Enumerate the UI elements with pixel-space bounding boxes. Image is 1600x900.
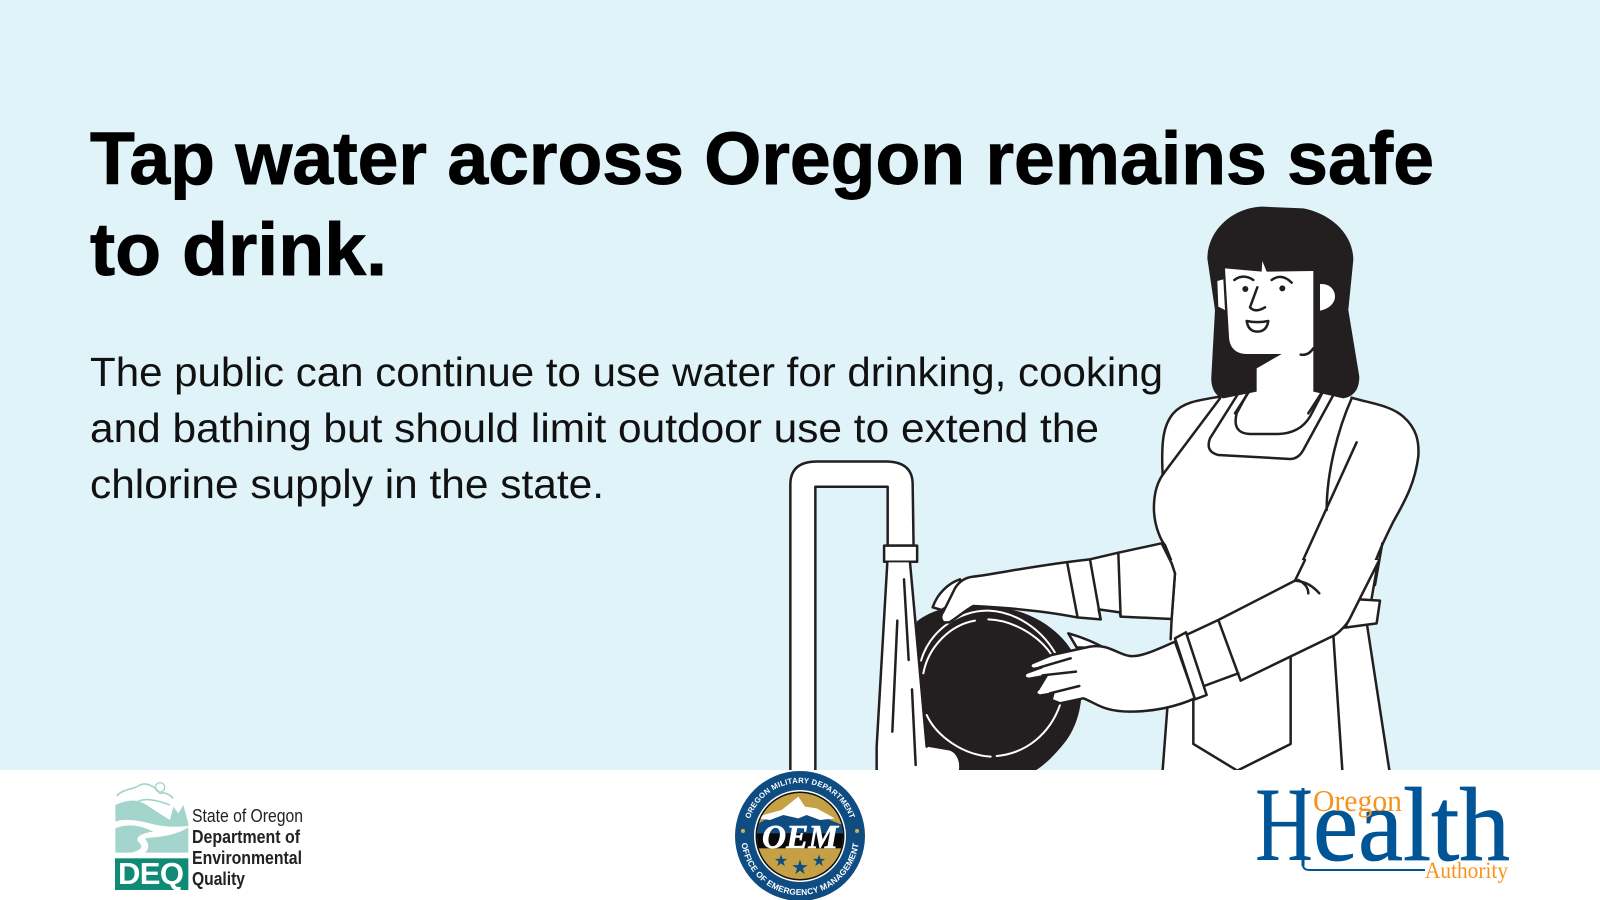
face and neck	[1217, 261, 1335, 413]
logo: DEQ: Quality	[192, 869, 245, 889]
figure: far arm with hand on plate	[941, 543, 1175, 622]
figure: head and hair	[1207, 207, 1359, 413]
title: to drink.	[90, 208, 387, 291]
apron tie	[1345, 599, 1380, 628]
footer band	[0, 770, 1600, 900]
logo: Oregon Health Authority: H	[1255, 766, 1313, 883]
logo: DEQ	[115, 783, 303, 891]
logo: Oregon Health Authority: ealth	[1313, 766, 1510, 883]
logo: Oregon Office of Emergency Management seal: OFFICE OF EMERGENCY MANAGEMENT	[742, 842, 858, 896]
logo: Oregon Office of Emergency Management seal: ★	[812, 851, 826, 870]
logo: Oregon Office of Emergency Management seal: OREGON MILITARY DEPARTMENT	[746, 778, 856, 818]
logo: Oregon Office of Emergency Management seal: OEM	[762, 819, 840, 856]
title	[90, 117, 1434, 291]
body text	[90, 349, 1163, 507]
body text: and bathing but should limit outdoor use to extend the	[90, 405, 1099, 451]
logo: DEQ: Environmental	[192, 848, 302, 868]
icon: faucet	[790, 462, 917, 773]
logo: Oregon Office of Emergency Management seal: ★	[791, 855, 809, 879]
body text: chlorine supply in the state.	[90, 461, 604, 507]
figure: lower apron	[1163, 560, 1389, 771]
figure: near hand	[1025, 642, 1195, 712]
logo: DEQ: Department of	[192, 827, 301, 847]
illustration: woman washing a dish at a faucet	[790, 207, 1418, 773]
logo: Oregon Health Authority: Authority	[1425, 858, 1508, 883]
icon: dark plate	[917, 579, 1105, 772]
logo: Oregon Health Authority: Oregon	[1313, 783, 1402, 818]
icon: running water	[877, 562, 959, 772]
logo: Oregon Office of Emergency Management seal	[735, 771, 865, 900]
logo: DEQ: DEQ	[118, 856, 184, 891]
figure: upper torso and apron bib	[1154, 388, 1418, 592]
logo: DEQ: State of Oregon	[192, 806, 303, 826]
body text: The public can continue to use water for drinking, cooking	[90, 349, 1163, 395]
logo: Oregon Office of Emergency Management seal: ★	[774, 851, 788, 870]
figure: near sleeve and cuff	[1175, 560, 1379, 699]
title: Tap water across Oregon remains safe	[90, 117, 1434, 200]
